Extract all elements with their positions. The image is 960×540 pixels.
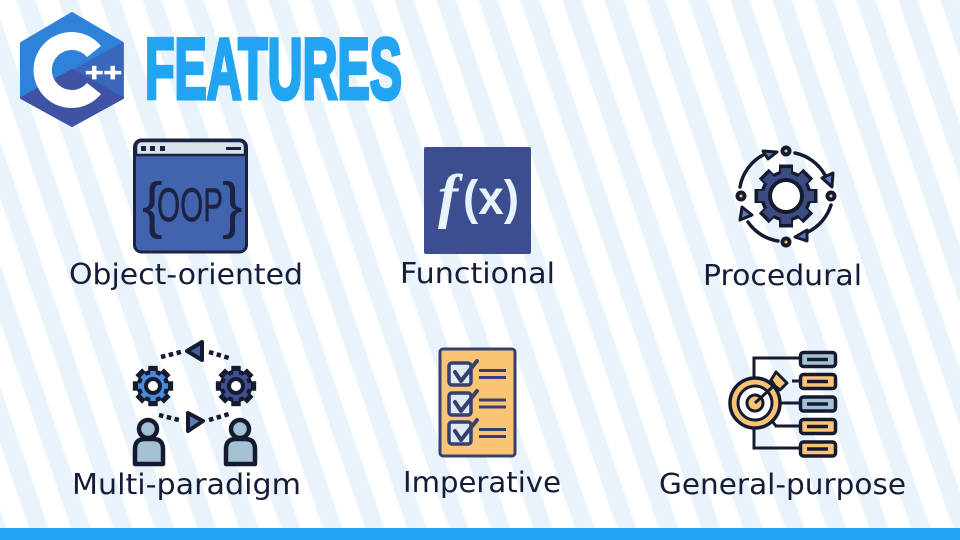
icon: OOP window [134,140,246,252]
feature: Imperative [403,349,561,499]
icon: gear cycle [738,148,834,246]
icon: OOP window: OOP [157,178,223,231]
icon: target with goals [730,352,836,456]
icon: C++ logo [21,13,123,126]
icon: OOP window: } [222,171,243,240]
feature: General-purpose [659,352,906,501]
label: Functional [400,257,555,290]
label: Multi-paradigm [72,468,301,501]
label: Procedural [703,259,862,292]
icon: OOP window: { [142,171,163,240]
feature: Object-oriented [69,140,303,291]
label: Imperative [403,466,561,499]
feature: Procedural [703,148,862,292]
icon: f(x): (x) [463,172,519,225]
icon: f(x) [424,147,531,254]
icon: paradigm exchange [134,342,255,464]
title: FEATURES [145,22,402,118]
feature: Multi-paradigm [72,342,301,501]
bottom bar [0,528,960,540]
icon: checklist [440,349,515,456]
feature: Functional [400,147,555,290]
label: General-purpose [659,468,906,501]
label: Object-oriented [69,258,303,291]
icon: C++ logo: ++ [85,59,122,87]
icon: f(x): f [438,163,463,229]
